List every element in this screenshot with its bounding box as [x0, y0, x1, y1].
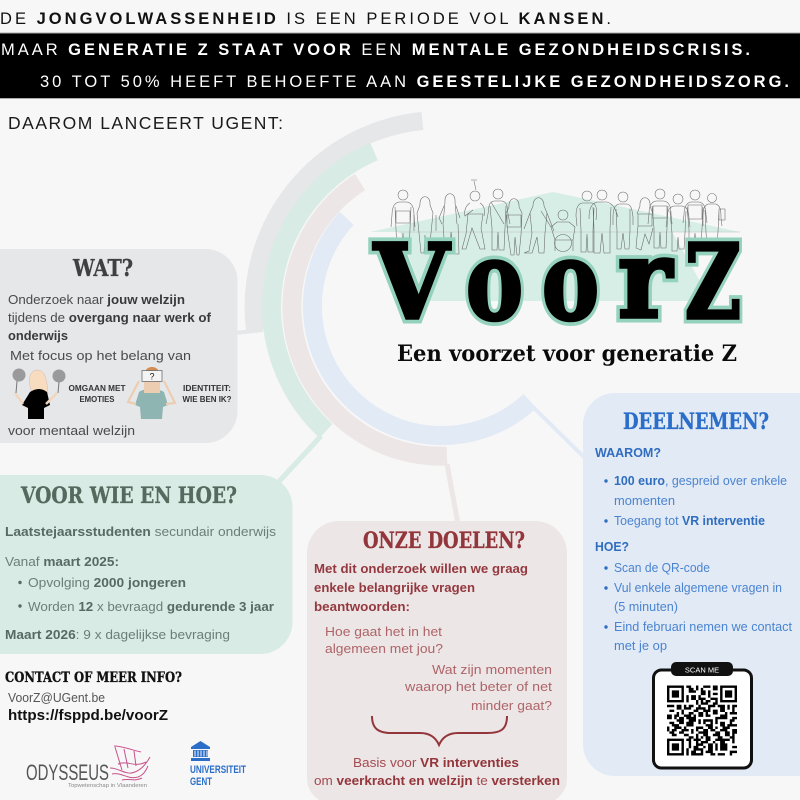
- contact block: [5, 670, 182, 724]
- intro line: DE JONGVOLWASSENHEID IS EEN PERIODE VOL KANSEN.: [0, 10, 614, 28]
- logo: Universiteit Gent: UNIVERSITEIT: [190, 764, 246, 776]
- audience and schedule text: Vanaf maart 2025:: [5, 554, 119, 569]
- logo background shape: [370, 192, 740, 301]
- WAT body text: Onderzoek naar jouw welzijn: [8, 292, 185, 307]
- WAT body text: tijdens de overgang naar werk of: [8, 310, 212, 325]
- goals intro: beantwoorden:: [314, 599, 410, 614]
- icon: man hiding face behind question mark: [128, 367, 175, 419]
- logo letters: V: [373, 222, 451, 343]
- WAT body text: Met focus op het belang van: [10, 348, 191, 363]
- participation text: momenten: [614, 493, 675, 508]
- logo letters: [373, 215, 741, 345]
- heading: WAT: WAT?: [72, 255, 133, 282]
- emotions label: EMOTIES: [80, 395, 115, 404]
- panel: WAT: [0, 249, 238, 443]
- contact block: VoorZ@UGent.be: [8, 690, 105, 705]
- logo letters: r: [618, 215, 673, 343]
- identity label: IDENTITEIT:: [183, 384, 231, 393]
- black banner: MAAR GENERATIE Z STAAT VOOR EEN MENTALE GEZONDHEIDSCRISIS.: [1, 41, 753, 59]
- audience and schedule text: Maart 2026 : 9 x dagelijkse bevraging: [5, 627, 230, 642]
- logo letters: r: [618, 215, 673, 343]
- heading: ONZE DOELEN: ONZE DOELEN?: [363, 528, 525, 554]
- research questions: [325, 624, 552, 713]
- logo letters: Z: [685, 222, 741, 343]
- audience and schedule text: [5, 524, 277, 642]
- goals conclusion: [314, 755, 560, 788]
- participation text: met je op: [614, 638, 667, 653]
- black banner: 30 TOT 50% HEEFT BEHOEFTE AAN GEESTELIJKE GEZONDHEIDSZORG.: [40, 73, 792, 91]
- QR code: [667, 686, 737, 756]
- logo letters: o: [466, 217, 523, 345]
- emotions label: OMGAAN MET: [68, 384, 126, 393]
- WAT body text: [8, 292, 212, 438]
- icon: woman with emotion masks: [12, 368, 66, 419]
- research questions: waarop het beter of net: [404, 679, 552, 694]
- participation text: HOE?: [595, 540, 629, 554]
- WAT body text: onderwijs: [8, 328, 68, 343]
- logo letters: o: [542, 217, 599, 345]
- logo letters: o: [542, 217, 599, 345]
- illustration: group of young people: [391, 180, 740, 255]
- black banner: [0, 32, 800, 99]
- research questions: algemeen met jou?: [325, 641, 443, 656]
- contact block: CONTACT OF MEER INFO?: [5, 670, 182, 686]
- audience and schedule text: Laatstejaarsstudenten secundair onderwijs: [5, 524, 277, 539]
- panel: ONZE DOELEN: [307, 521, 567, 800]
- participation text: 100 euro, gespreid over enkele: [614, 473, 787, 488]
- audience and schedule text: Opvolging 2000 jongeren: [28, 575, 186, 590]
- participation text: Vul enkele algemene vragen in: [614, 580, 782, 595]
- participation text: WAAROM?: [595, 446, 661, 460]
- QR code card: SCAN ME: [685, 666, 719, 674]
- logo: Odysseus: ODYSSEUS: [26, 760, 109, 785]
- participation text: Eind februari nemen we contact: [614, 619, 792, 634]
- participation text: Toegang tot VR interventie: [614, 513, 765, 528]
- research questions: Wat zijn momenten: [432, 662, 552, 677]
- heading: DEELNEMEN: DEELNEMEN?: [623, 409, 769, 435]
- heading: VOOR WIE EN HOE: VOOR WIE EN HOE?: [20, 483, 237, 509]
- WAT body text: voor mentaal welzijn: [8, 423, 135, 438]
- logo: VoorZ: [370, 180, 741, 367]
- research questions: Hoe gaat het in het: [325, 624, 442, 639]
- identity label: WIE BEN IK?: [182, 395, 232, 404]
- emotions label: [68, 384, 126, 404]
- icon: man hiding face behind question mark: ?: [149, 372, 155, 382]
- concentric arcs with connectors: [235, 121, 592, 524]
- lead-in heading: DAAROM LANCEERT UGENT:: [8, 113, 283, 133]
- participation text: (5 minuten): [614, 599, 678, 614]
- logo: Odysseus: [26, 746, 150, 789]
- logo letters: Z: [685, 222, 741, 343]
- brace: [372, 716, 507, 745]
- goals intro: Met dit onderzoek willen we graag: [314, 561, 528, 576]
- goals intro: enkele belangrijke vragen: [314, 580, 475, 595]
- logo letters: o: [466, 217, 523, 345]
- participation text: Scan de QR-code: [614, 560, 710, 575]
- logo: Universiteit Gent: [190, 741, 246, 788]
- logo: Odysseus: Topwetenschap in Vlaanderen: [68, 783, 147, 789]
- participation text: [595, 446, 792, 653]
- goals intro: [314, 561, 528, 614]
- logo tagline: Een voorzet voor generatie Z: [397, 341, 737, 367]
- research questions: minder gaat?: [471, 698, 552, 713]
- identity label: [182, 384, 232, 404]
- goals conclusion: om veerkracht en welzijn te versterken: [314, 773, 560, 788]
- panel: VOOR WIE EN HOE: [0, 475, 292, 654]
- panel: DEELNEMEN: [583, 393, 800, 776]
- QR code card: [654, 662, 752, 768]
- audience and schedule text: Worden 12 x bevraagd gedurende 3 jaar: [28, 599, 274, 614]
- logo: Universiteit Gent: GENT: [190, 776, 212, 788]
- logo letters: V: [373, 222, 451, 343]
- contact block: https://fsppd.be/voorZ: [8, 707, 168, 724]
- goals conclusion: Basis voor VR interventies: [353, 755, 519, 770]
